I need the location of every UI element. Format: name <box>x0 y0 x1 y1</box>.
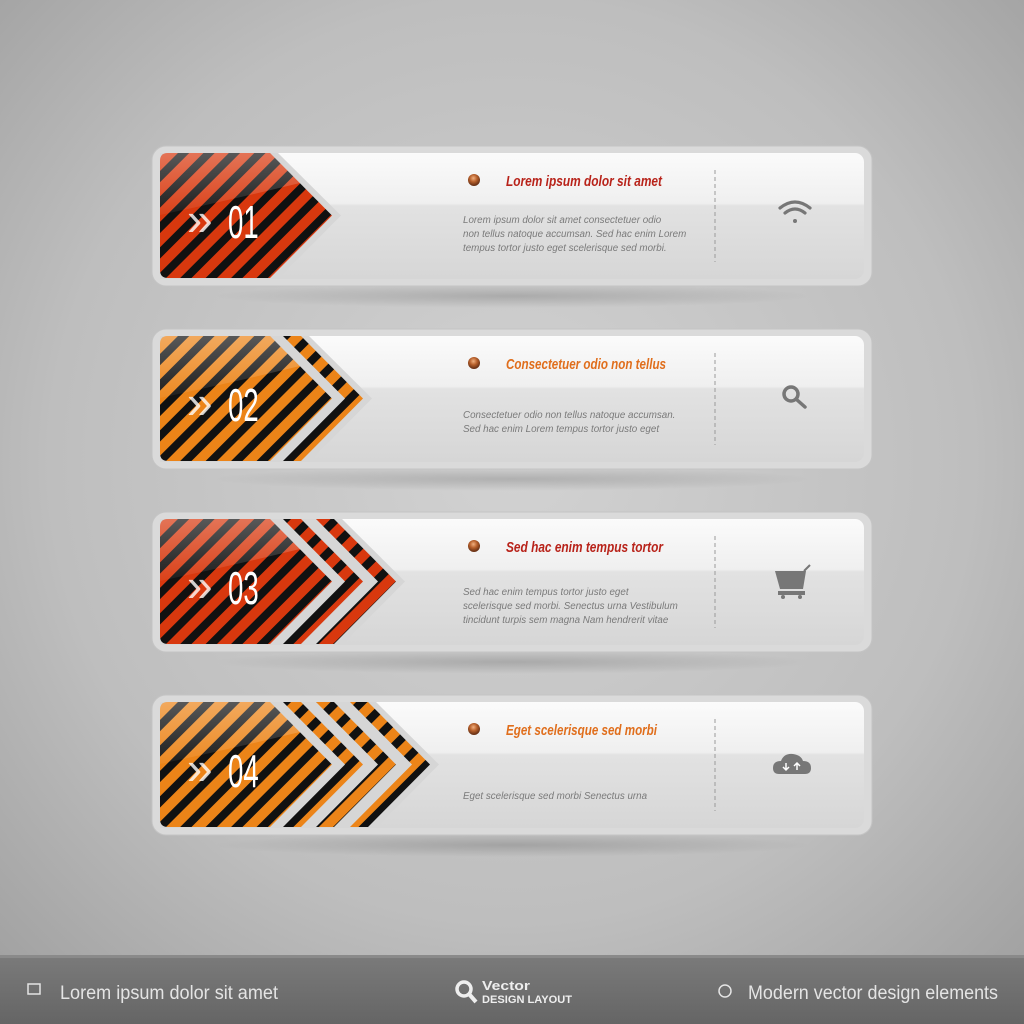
icon: search <box>784 387 805 407</box>
title 04 <box>468 722 658 739</box>
footer logo: DESIGN LAYOUT <box>482 994 572 1006</box>
footer right: Modern vector design elements <box>748 983 998 1004</box>
stripe chevron 02: » <box>187 376 213 428</box>
card 2 <box>152 329 872 491</box>
title 01: Lorem ipsum dolor sit amet <box>506 173 663 190</box>
stripe chevron 03 <box>160 519 396 644</box>
body 03: tincidunt turpis sem magna Nam hendrerit vitae <box>463 615 669 626</box>
title 01 <box>468 173 663 190</box>
icon: wifi <box>780 202 810 223</box>
card 4 <box>152 695 872 857</box>
footer logo <box>457 978 572 1006</box>
stripe chevron 03: » <box>187 559 213 611</box>
body 03: Sed hac enim tempus tortor justo eget <box>463 587 630 598</box>
stripe chevron 01: » <box>187 193 213 245</box>
footer bar <box>0 955 1024 1024</box>
body 01: non tellus natoque accumsan. Sed hac enim Lorem <box>463 229 686 240</box>
title 02: Consectetuer odio non tellus <box>506 356 666 373</box>
body 03: scelerisque sed morbi. Senectus urna Vestibulum <box>463 601 678 612</box>
stripe chevron 04 <box>160 702 430 827</box>
stripe chevron 04: » <box>187 742 213 794</box>
card 1 <box>152 146 872 308</box>
footer left: Lorem ipsum dolor sit amet <box>60 983 279 1004</box>
stripe chevron 01 <box>160 153 332 278</box>
title 04: Eget scelerisque sed morbi <box>506 722 658 739</box>
icon: cloud <box>773 754 811 774</box>
body 01: Lorem ipsum dolor sit amet consectetuer odio <box>463 215 662 226</box>
body 02: Sed hac enim Lorem tempus tortor justo eget <box>463 424 660 435</box>
body 04: Eget scelerisque sed morbi Senectus urna <box>463 791 648 802</box>
title 02 <box>468 356 666 373</box>
stripe chevron 03: 03 <box>228 564 259 615</box>
title 03 <box>468 539 664 556</box>
stripe chevron 02: 02 <box>228 381 259 432</box>
stripe chevron 04: 04 <box>228 747 259 798</box>
card 3 <box>152 512 872 674</box>
icon: cart <box>775 565 810 599</box>
body 01: tempus tortor justo eget scelerisque sed morbi. <box>463 243 667 254</box>
body 02: Consectetuer odio non tellus natoque accumsan. <box>463 410 675 421</box>
title 03: Sed hac enim tempus tortor <box>506 539 664 556</box>
stripe chevron 01: 01 <box>228 198 259 249</box>
footer logo: Vector <box>482 978 530 993</box>
stripe chevron 02 <box>160 336 363 461</box>
